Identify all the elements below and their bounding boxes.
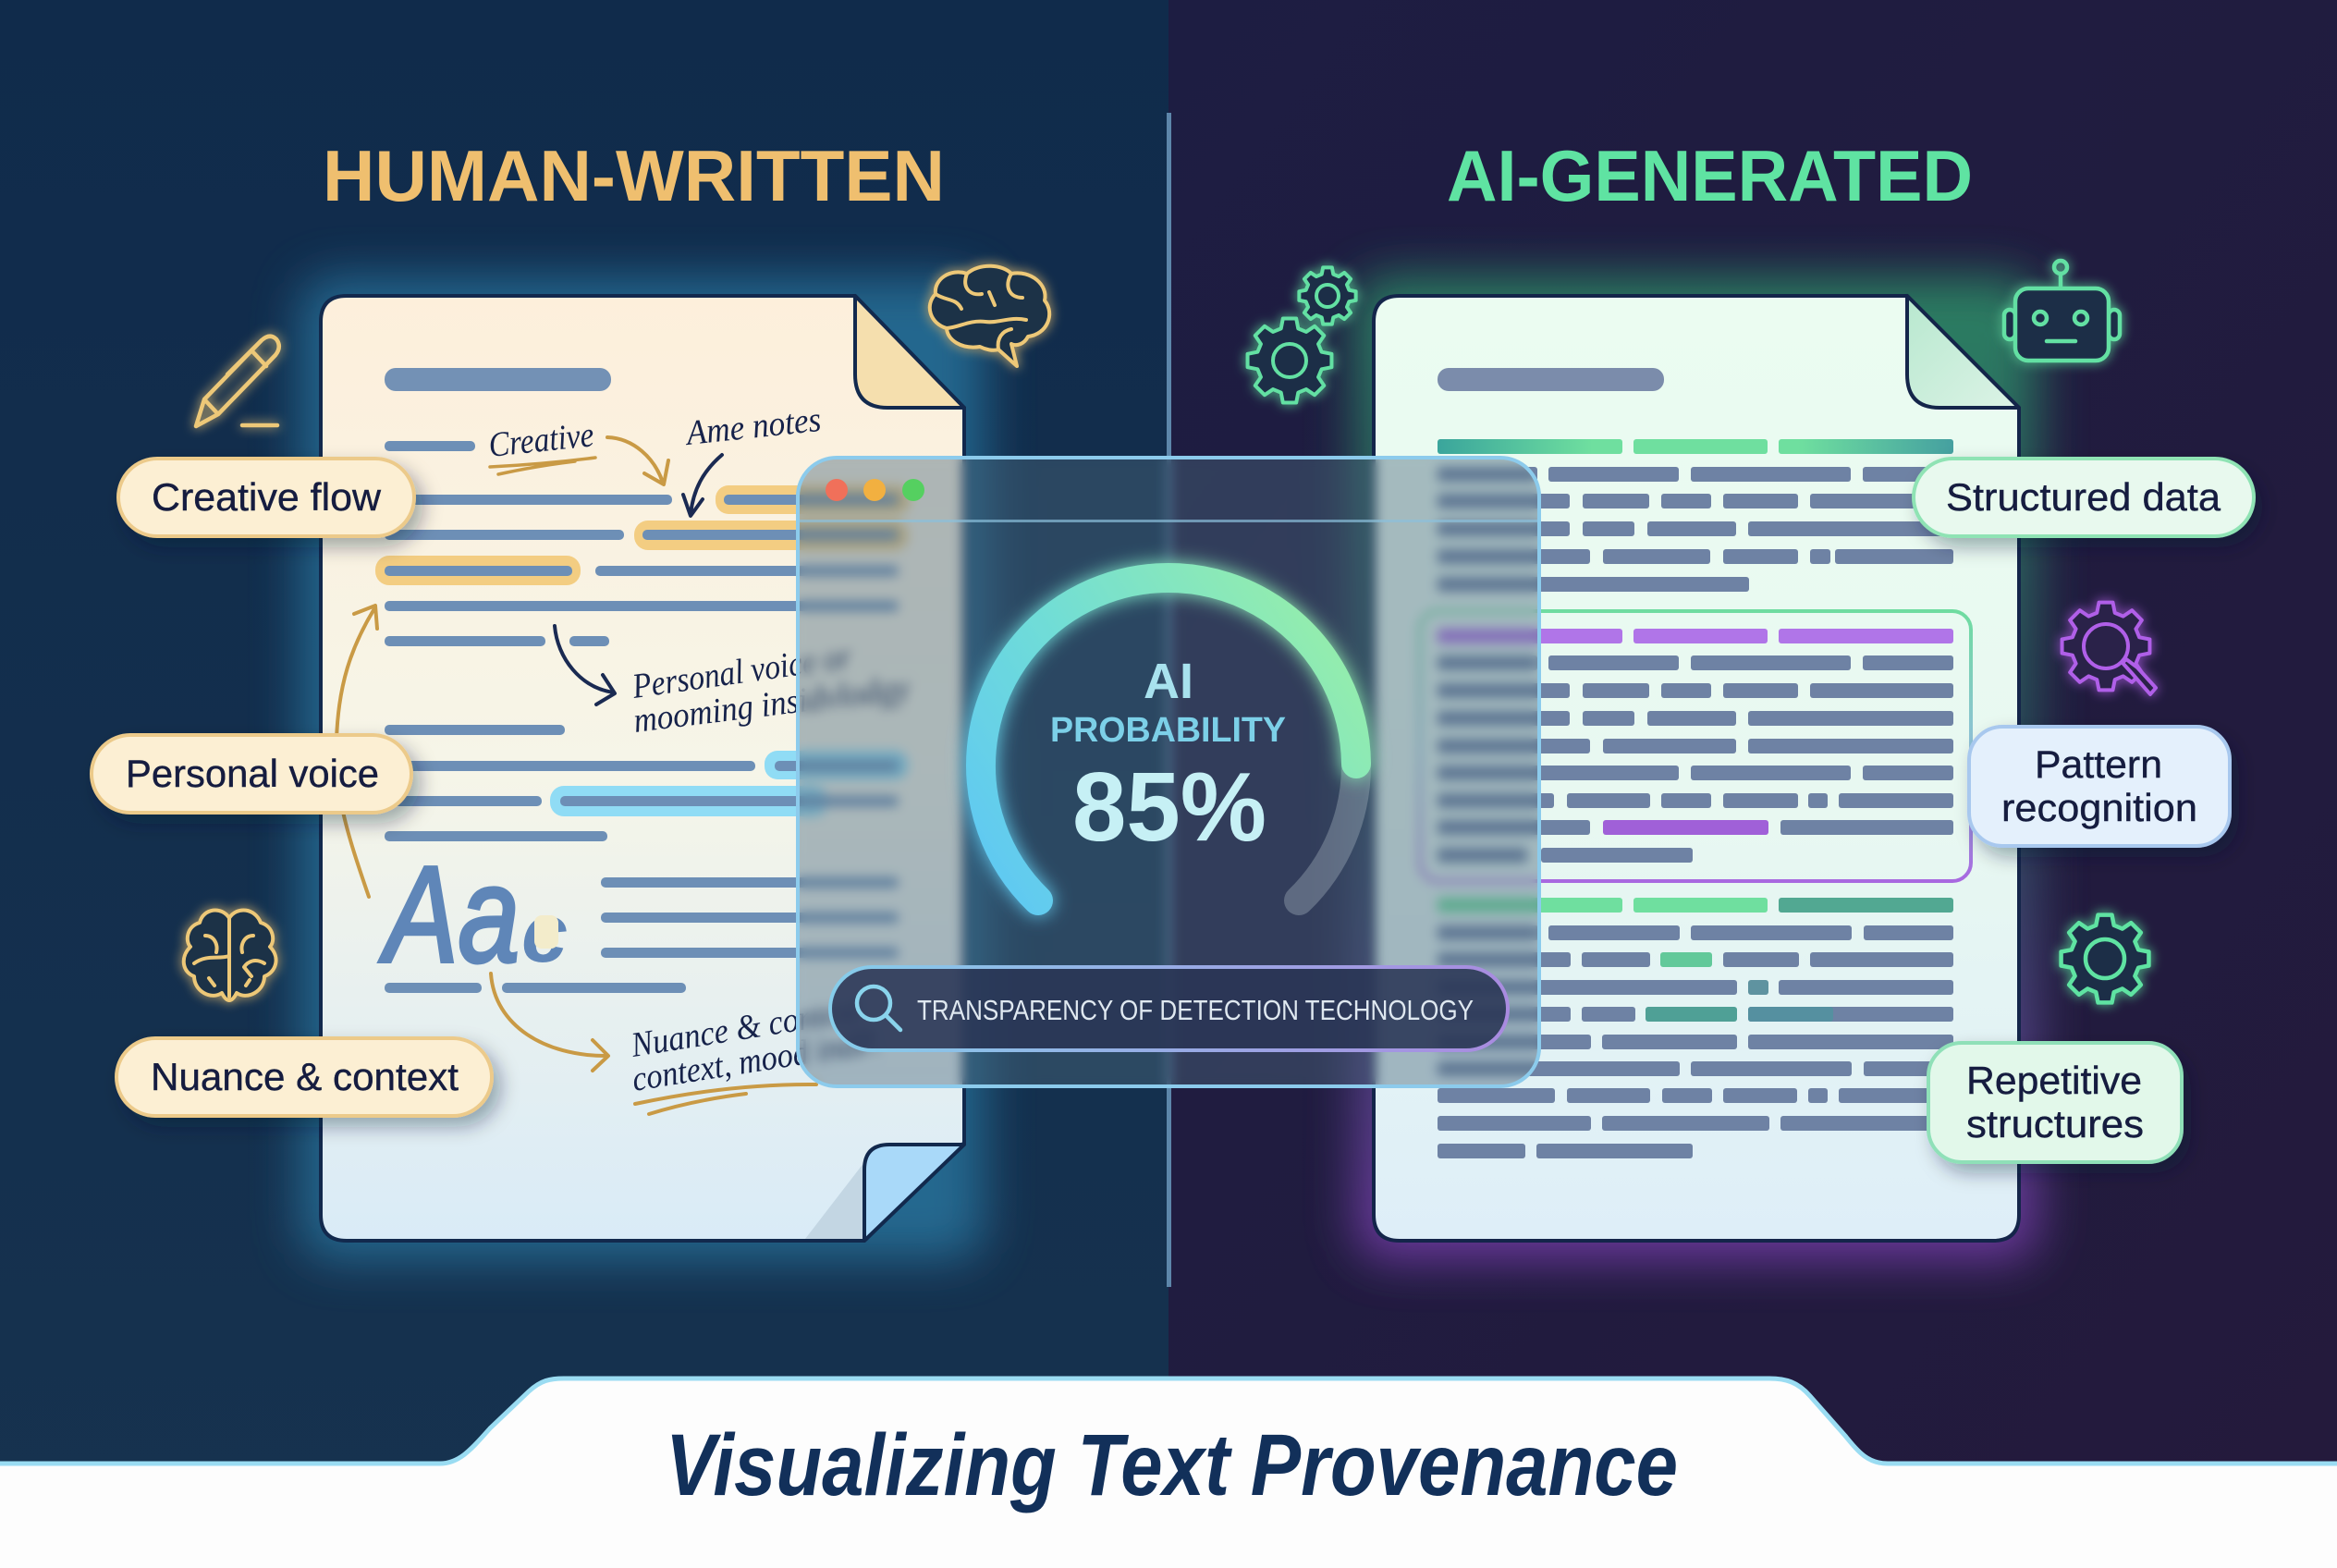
gauge value arc (981, 578, 1356, 900)
gauge track (1299, 764, 1356, 900)
icon: gears (1248, 267, 1356, 402)
heading: AI-generated: AI-GENERATED (1447, 135, 1973, 216)
arrow: to personal voice note (555, 626, 615, 704)
gauge (981, 578, 1356, 900)
arrow: sample to nuance note (491, 974, 608, 1071)
panel: frosted detection glass (796, 456, 1541, 1088)
icon: brain top (930, 266, 1049, 366)
icon: robot (2004, 261, 2120, 361)
background: human side (0, 0, 1168, 1568)
header row purple (1438, 629, 1953, 643)
icon: pen (196, 337, 279, 426)
detection technology pill (830, 967, 1508, 1050)
text lines (385, 441, 899, 993)
handwriting sample Aa: c (521, 888, 568, 980)
background: AI side (1168, 0, 2337, 1568)
highlights (375, 485, 910, 585)
document glow (300, 277, 985, 1259)
handwritten: personal voice note (630, 637, 912, 741)
label: nuance and context: Nuance & context (151, 1055, 459, 1098)
document title bar (385, 368, 611, 391)
document sheet (1374, 296, 2019, 1241)
handwritten: personal voice note: Personal voice or (630, 637, 853, 706)
handwritten: Ame notes: Ame notes (682, 400, 823, 453)
page fold (1907, 296, 2019, 408)
label: creative flow: Creative flow (152, 475, 382, 519)
handwritten: nuance note: Nuance & context (628, 990, 864, 1065)
page fold top (855, 296, 964, 408)
label: repetitive structures: Repetitive (1966, 1059, 2142, 1102)
header row green lower (1438, 898, 1953, 913)
handwriting sample Aa: Aa (379, 839, 520, 991)
handwritten: Creative: Creative (487, 415, 595, 465)
center divider (1167, 113, 1171, 1287)
pattern highlight box (1420, 611, 1971, 881)
document sheet (321, 296, 964, 1241)
arrow: creative to highlight (607, 437, 668, 484)
document glow (1355, 277, 2037, 1259)
heading: human-written: HUMAN-WRITTEN (323, 135, 945, 216)
label: structured data (1914, 459, 2254, 536)
label: nuance and context (116, 1038, 492, 1116)
document title bar (1438, 368, 1664, 391)
panel: AI-generated document (1355, 277, 2037, 1259)
label: structured data: Structured data (1946, 475, 2221, 519)
arrow: personal voice upward (336, 606, 377, 897)
label: personal voice (92, 735, 411, 813)
icon: magnifier (857, 986, 900, 1030)
arrow: notes to highlight (683, 455, 722, 516)
label: personal voice: Personal voice (126, 752, 379, 795)
gauge label AI: AI (1144, 654, 1193, 709)
label: repetitive structures: structures (1966, 1102, 2144, 1145)
header row green (1438, 439, 1953, 454)
label: pattern recognition: recognition (2001, 786, 2197, 829)
handwritten: nuance note (628, 990, 882, 1114)
label: repetitive structures (1928, 1043, 2182, 1162)
footer title panel (0, 1378, 2337, 1568)
handwritten: personal voice note: mooming insidvlodgy (631, 668, 912, 741)
label: pattern recognition (1969, 727, 2230, 846)
label: pattern recognition: Pattern (2035, 742, 2162, 786)
gauge label probability: PROBABILITY (1050, 711, 1286, 750)
blue highlights (550, 751, 908, 816)
structured data rows (1438, 467, 1953, 1158)
handwritten: nuance note: context, mood indP. (630, 1022, 882, 1099)
icon: gear with magnifier (2062, 603, 2156, 694)
window bar line (798, 520, 1539, 522)
icon: brain lower (184, 910, 276, 1000)
icon: gear lower (2062, 915, 2148, 1002)
window dots (826, 479, 924, 501)
page fold bottom (805, 1145, 964, 1241)
footer title: Visualizing Text Provenance (666, 1416, 1678, 1514)
gauge value: 85% (1072, 753, 1266, 862)
label: creative flow (118, 459, 414, 536)
panel: human-written document (300, 277, 985, 1259)
